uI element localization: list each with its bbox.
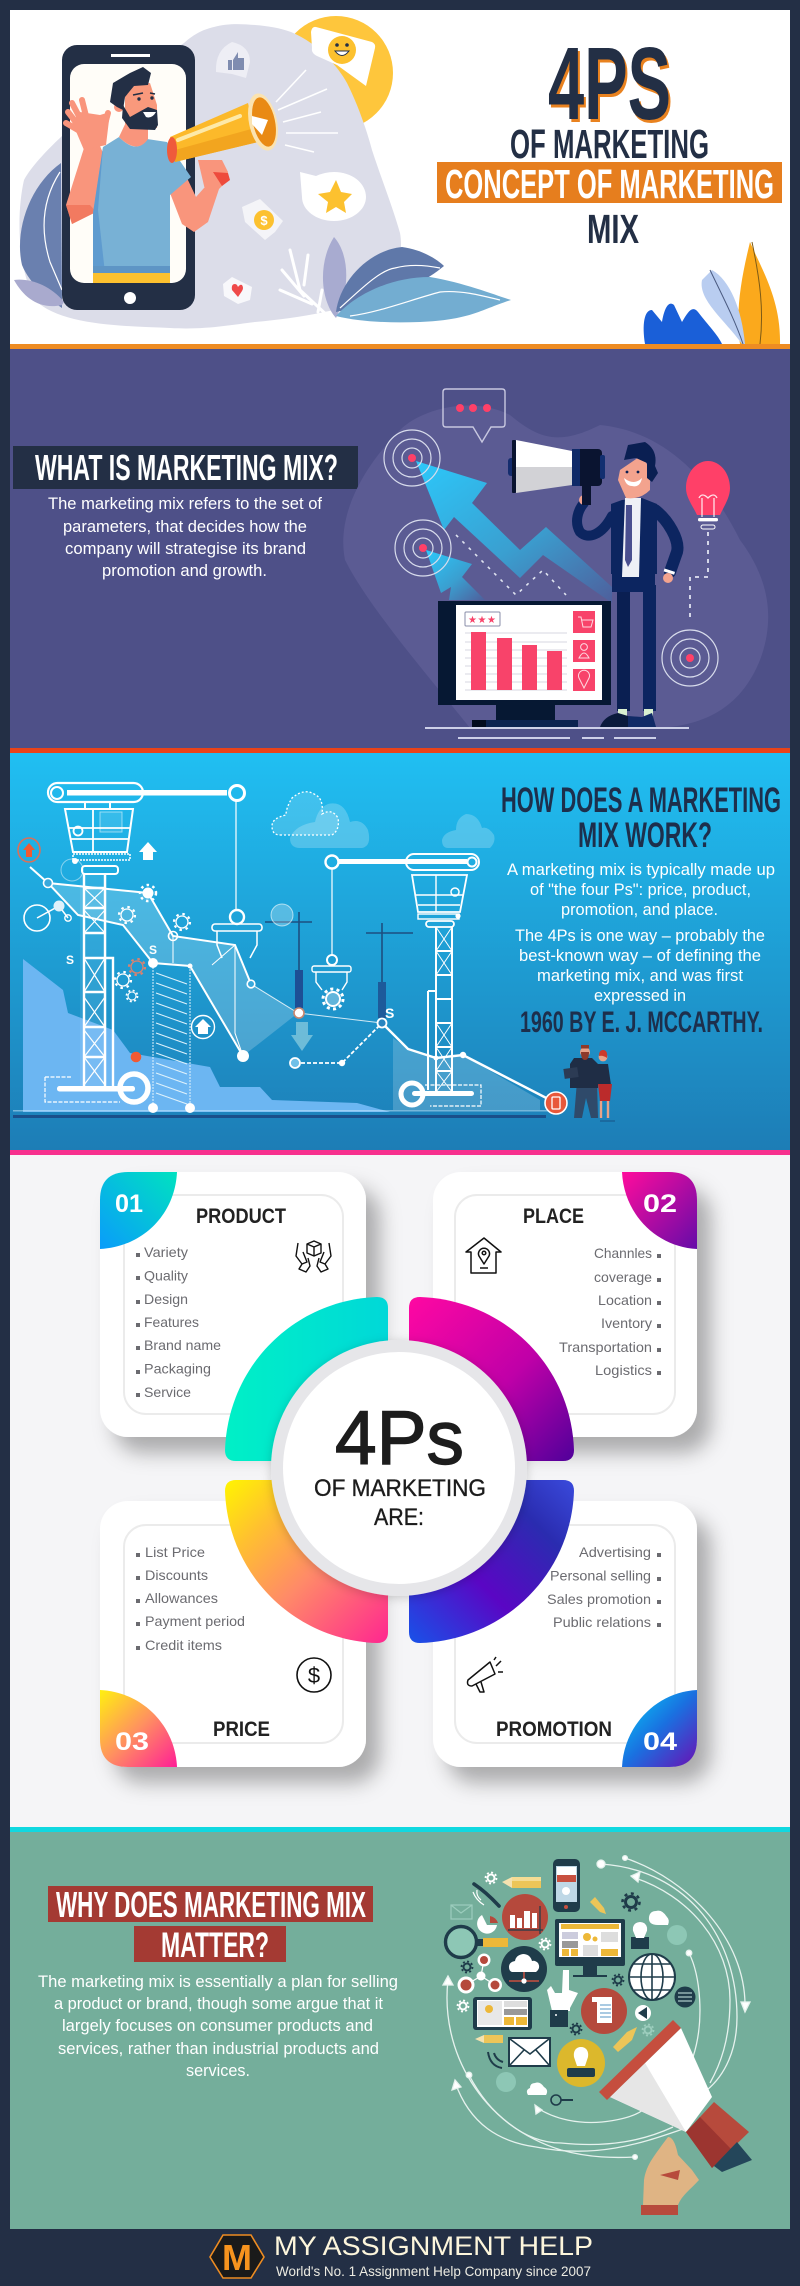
text block — [507, 860, 775, 1005]
quadrant: bottom right — [409, 1480, 574, 1643]
arrow big — [416, 461, 612, 603]
shaded network — [48, 883, 298, 1056]
network lines — [30, 867, 556, 1103]
background blob — [19, 24, 401, 328]
illustration: man in phone with megaphone — [14, 16, 511, 328]
corner tab 03 — [100, 1690, 177, 1767]
arrow small — [426, 550, 485, 600]
nodes and gears: S — [385, 1005, 394, 1021]
envelope — [509, 2038, 550, 2066]
corner tab 04 — [622, 1690, 697, 1767]
illustration: digital marketing megaphone — [443, 1856, 752, 2215]
bubble: star — [300, 172, 366, 221]
bubble: heart — [223, 277, 252, 304]
text block: promotion and growth. — [102, 561, 267, 580]
heading: PRODUCT — [196, 1205, 286, 1228]
heading line 1 — [48, 1884, 373, 1925]
small icons — [451, 1877, 696, 2105]
monitor: ★★★ — [468, 615, 496, 626]
icon: dollar: $ — [308, 1663, 320, 1688]
list: Personal selling — [550, 1568, 651, 1584]
icon: hands and box — [296, 1241, 331, 1272]
brand name: MY ASSIGNMENT HELP — [274, 2231, 593, 2261]
heading: MIX WORK? — [578, 816, 712, 855]
text block: The marketing mix refers to the set of — [48, 494, 322, 513]
text block: A marketing mix is typically made up — [507, 860, 775, 879]
centre circle: 4Ps — [335, 1396, 464, 1481]
centre circle — [271, 1340, 527, 1596]
list — [136, 1244, 221, 1400]
heading: WHAT IS MARKETING MIX? — [35, 447, 338, 488]
corner tab 04: 04 — [643, 1728, 677, 1756]
heading line 2: MATTER? — [161, 1926, 269, 1965]
list: Allowances — [145, 1590, 218, 1606]
panel: 4Ps diagram — [10, 1155, 790, 1827]
text block: expressed in — [594, 986, 686, 1005]
list: Sales promotion — [547, 1591, 651, 1607]
globe — [629, 1954, 675, 2000]
title: mix: MIX — [587, 206, 639, 252]
document circle — [581, 1988, 627, 2034]
heading line 1: WHY DOES MARKETING MIX — [56, 1884, 366, 1925]
logo — [210, 2235, 264, 2278]
text block: of "the four Ps": price, product, — [530, 880, 751, 899]
dashed trend — [456, 535, 566, 595]
left tower — [45, 783, 244, 1102]
centre plants — [280, 237, 511, 322]
tagline: World's No. 1 Assignment Help Company since 2007 — [276, 2263, 591, 2279]
list: List Price — [145, 1544, 205, 1560]
phone — [62, 45, 195, 310]
illustration: cranes and network — [13, 783, 615, 1121]
footer: logo and tagline — [210, 2231, 593, 2279]
panel: how does marketing mix work — [10, 753, 790, 1150]
text block: promotion, and place. — [561, 900, 718, 919]
quadrant: top right — [409, 1297, 574, 1461]
tablet — [473, 1997, 532, 2030]
list: Brand name — [144, 1337, 221, 1353]
text block: company will strategise its brand — [65, 539, 306, 558]
centre circle: ARE: — [374, 1504, 424, 1531]
text block: services, rather than industrial products and — [58, 2039, 379, 2058]
list: Service — [144, 1384, 191, 1400]
light bulb — [686, 461, 730, 622]
gears — [458, 1872, 654, 2036]
rope and grippers — [212, 801, 351, 1009]
list — [136, 1544, 245, 1653]
list: Logistics — [595, 1362, 652, 1378]
text block: The marketing mix is essentially a plan for selling — [38, 1972, 398, 1991]
target 1 — [384, 430, 440, 486]
heading — [13, 446, 358, 489]
list: Location — [598, 1292, 652, 1308]
pointing hand — [547, 1970, 578, 2027]
illustration: businessman and analytics — [343, 389, 768, 739]
card: promotion — [433, 1501, 697, 1767]
list: Packaging — [144, 1360, 211, 1376]
list: coverage — [594, 1269, 652, 1285]
ground lines — [425, 727, 689, 739]
text block: largely focuses on consumer products and — [62, 2016, 373, 2035]
quadrant: bottom left — [225, 1480, 388, 1643]
text block: The 4Ps is one way – probably the — [515, 926, 765, 945]
large megaphone — [599, 2020, 752, 2172]
monitor — [555, 1919, 625, 1977]
list: Advertising — [579, 1544, 651, 1560]
title: 4PS — [548, 26, 673, 144]
list: Features — [144, 1314, 199, 1330]
cloud circle — [501, 1946, 547, 1992]
magnifier — [446, 1926, 508, 1958]
bubble: dollar: $ — [260, 213, 268, 228]
target 2 — [395, 520, 451, 576]
list: Channles — [594, 1245, 652, 1261]
person circle — [557, 2039, 605, 2087]
icon: house with pin — [466, 1238, 501, 1273]
list: Public relations — [553, 1614, 651, 1630]
heading — [501, 781, 781, 855]
nodes and gears — [24, 878, 466, 1113]
icon: arrows — [18, 838, 214, 1038]
construction cranes — [265, 904, 413, 1051]
card: place — [433, 1172, 697, 1437]
list: Discounts — [145, 1567, 208, 1583]
heading: PLACE — [523, 1205, 584, 1228]
ground — [13, 1110, 548, 1118]
corner tab 03: 03 — [115, 1728, 149, 1756]
clouds — [272, 792, 494, 848]
list — [547, 1544, 661, 1630]
orange node — [545, 1092, 567, 1114]
panel: header — [10, 10, 790, 344]
title: 4PS: 4PS — [550, 29, 673, 144]
left leaves — [14, 163, 64, 308]
card: price — [100, 1501, 366, 1767]
text block: a product or brand, though some argue that it — [54, 1994, 383, 2013]
list — [559, 1245, 661, 1378]
text block — [48, 494, 322, 580]
orbit lines — [443, 1856, 750, 2159]
panel: why does marketing mix matter — [10, 1832, 790, 2229]
panel: what is marketing mix — [10, 349, 790, 748]
hill — [23, 959, 390, 1112]
monitor — [438, 601, 611, 728]
yellow circle — [279, 16, 393, 130]
target 3 — [662, 630, 718, 686]
heading line 2 — [134, 1926, 286, 1965]
corner tab 02 — [622, 1172, 697, 1249]
blob — [343, 406, 768, 728]
logo: M — [222, 2237, 252, 2278]
corner tab 02: 02 — [643, 1190, 677, 1218]
quadrant: top left — [225, 1297, 388, 1461]
right corner plants — [644, 242, 780, 344]
text block — [38, 1972, 398, 2080]
list: Design — [144, 1291, 188, 1307]
icon: megaphone — [468, 1657, 503, 1692]
sound rays — [276, 70, 338, 152]
phone — [553, 1859, 580, 1912]
corner tab 01 — [100, 1172, 177, 1249]
striped column — [153, 966, 190, 1108]
list: Credit items — [145, 1637, 222, 1653]
bubble: dollar — [242, 199, 283, 240]
text block: marketing mix, and was first — [537, 966, 743, 985]
title: 4PS: 4PS — [548, 26, 671, 141]
list: Iventory — [601, 1315, 652, 1331]
list: Payment period — [145, 1613, 245, 1629]
heading: PROMOTION — [496, 1718, 612, 1741]
text block: parameters, that decides how the — [63, 517, 307, 536]
man — [66, 67, 220, 283]
icon: dollar — [297, 1658, 331, 1692]
text block: best-known way – of defining the — [519, 946, 761, 965]
list: Variety — [144, 1244, 188, 1260]
speech bubble — [443, 389, 505, 442]
corner tab 01: 01 — [115, 1190, 143, 1218]
bar chart circle — [502, 1894, 548, 1940]
people — [563, 1045, 615, 1121]
card: product — [100, 1172, 366, 1437]
nodes and gears: S — [66, 953, 74, 967]
text block: services. — [186, 2061, 250, 2080]
man and megaphone — [508, 440, 677, 727]
list: Quality — [144, 1268, 188, 1284]
bubble: thumbs up — [216, 42, 250, 78]
bubble: smiley — [311, 27, 375, 86]
right tower — [326, 854, 481, 1106]
megaphone — [167, 91, 283, 190]
centre circle: OF MARKETING — [314, 1475, 486, 1502]
heading: PRICE — [213, 1718, 270, 1741]
nodes and gears: S — [149, 943, 157, 957]
hand — [641, 2137, 699, 2215]
list: Transportation — [559, 1339, 652, 1355]
